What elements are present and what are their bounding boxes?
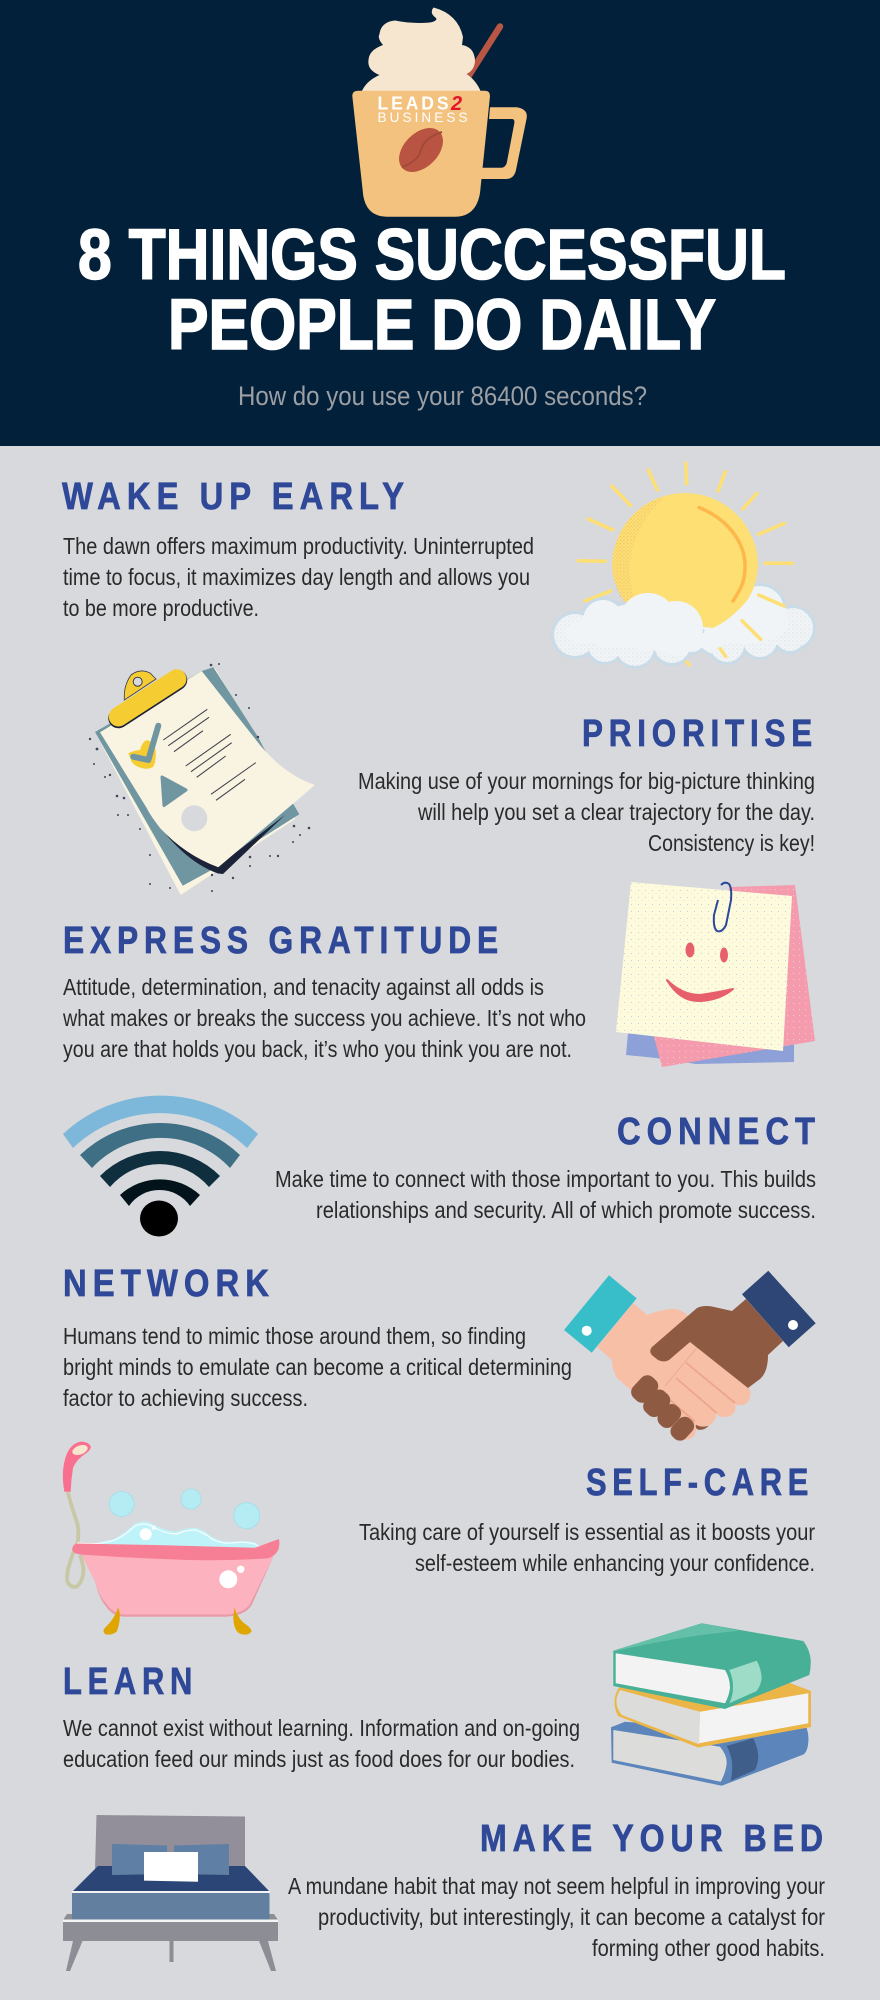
body text: Taking care of yourself is essential as it boosts your — [359, 1519, 815, 1545]
icon: sticky notes — [616, 882, 815, 1067]
logo wordmark: 2 — [450, 93, 462, 115]
icon: bathtub — [63, 1442, 279, 1635]
body text: Make time to connect with those important to you. This builds — [275, 1166, 816, 1192]
logo wordmark: BUSINESS — [378, 110, 468, 125]
logo wordmark — [378, 93, 468, 125]
panel: make your bed — [63, 1815, 829, 1971]
logo wordmark: LEADS — [378, 93, 452, 113]
subtitle: How do you use your 86400 seconds? — [238, 381, 647, 411]
body text: relationships and security. All of which promote success. — [316, 1197, 816, 1223]
body text: forming other good habits. — [592, 1935, 825, 1961]
body text — [358, 768, 815, 856]
body text — [63, 533, 534, 621]
icon: clipboard — [89, 663, 315, 895]
body text: bright minds to emulate can become a critical determining — [63, 1354, 572, 1380]
heading: CONNECT — [617, 1111, 821, 1153]
icon: bed — [63, 1815, 278, 1971]
panel: prioritise — [89, 663, 818, 895]
icon: sun and cloud — [554, 463, 813, 666]
body text — [275, 1166, 816, 1223]
icon: wifi signal — [63, 1096, 258, 1236]
body text: factor to achieving success. — [63, 1385, 308, 1411]
panel: self-care — [63, 1442, 815, 1635]
heading: SELF-CARE — [586, 1462, 814, 1504]
panel: express gratitude — [62, 882, 815, 1067]
title: PEOPLE DO DAILY — [168, 286, 716, 365]
icon: stack of books — [611, 1623, 811, 1786]
body text: education feed our minds just as food does for our bodies. — [63, 1746, 575, 1772]
body text: to be more productive. — [63, 595, 259, 621]
body text: Attitude, determination, and tenacity against all odds is — [63, 974, 544, 1000]
body text: you are that holds you back, it’s who you think you are not. — [63, 1036, 572, 1062]
body text: We cannot exist without learning. Information and on-going — [63, 1715, 580, 1741]
body text: The dawn offers maximum productivity. Uninterrupted — [63, 533, 534, 559]
panel: wake up early — [62, 463, 813, 666]
body text: time to focus, it maximizes day length and allows you — [63, 564, 530, 590]
panel: network — [63, 1263, 816, 1444]
heading: EXPRESS GRATITUDE — [63, 920, 504, 962]
panel: connect — [63, 1096, 821, 1236]
body text — [63, 1715, 580, 1772]
body text: Consistency is key! — [648, 830, 815, 856]
heading: LEARN — [63, 1661, 198, 1703]
title — [78, 216, 786, 365]
body text: will help you set a clear trajectory for the day. — [417, 799, 815, 825]
icon: handshake — [564, 1271, 816, 1444]
body text — [62, 974, 586, 1062]
heading: WAKE UP EARLY — [62, 476, 410, 518]
heading: PRIORITISE — [582, 713, 818, 755]
panel: header — [0, 0, 880, 446]
body text: Making use of your mornings for big-picture thinking — [358, 768, 815, 794]
body text — [63, 1323, 572, 1411]
body text — [359, 1519, 815, 1576]
body text — [288, 1873, 825, 1961]
body text: self-esteem while enhancing your confidence. — [415, 1550, 815, 1576]
icon: coffee mug with logo — [352, 8, 527, 217]
heading: NETWORK — [63, 1263, 275, 1305]
body text: what makes or breaks the success you achieve. It’s not who — [62, 1005, 586, 1031]
body text: Humans tend to mimic those around them, so finding — [63, 1323, 526, 1349]
panel: learn — [63, 1623, 811, 1786]
